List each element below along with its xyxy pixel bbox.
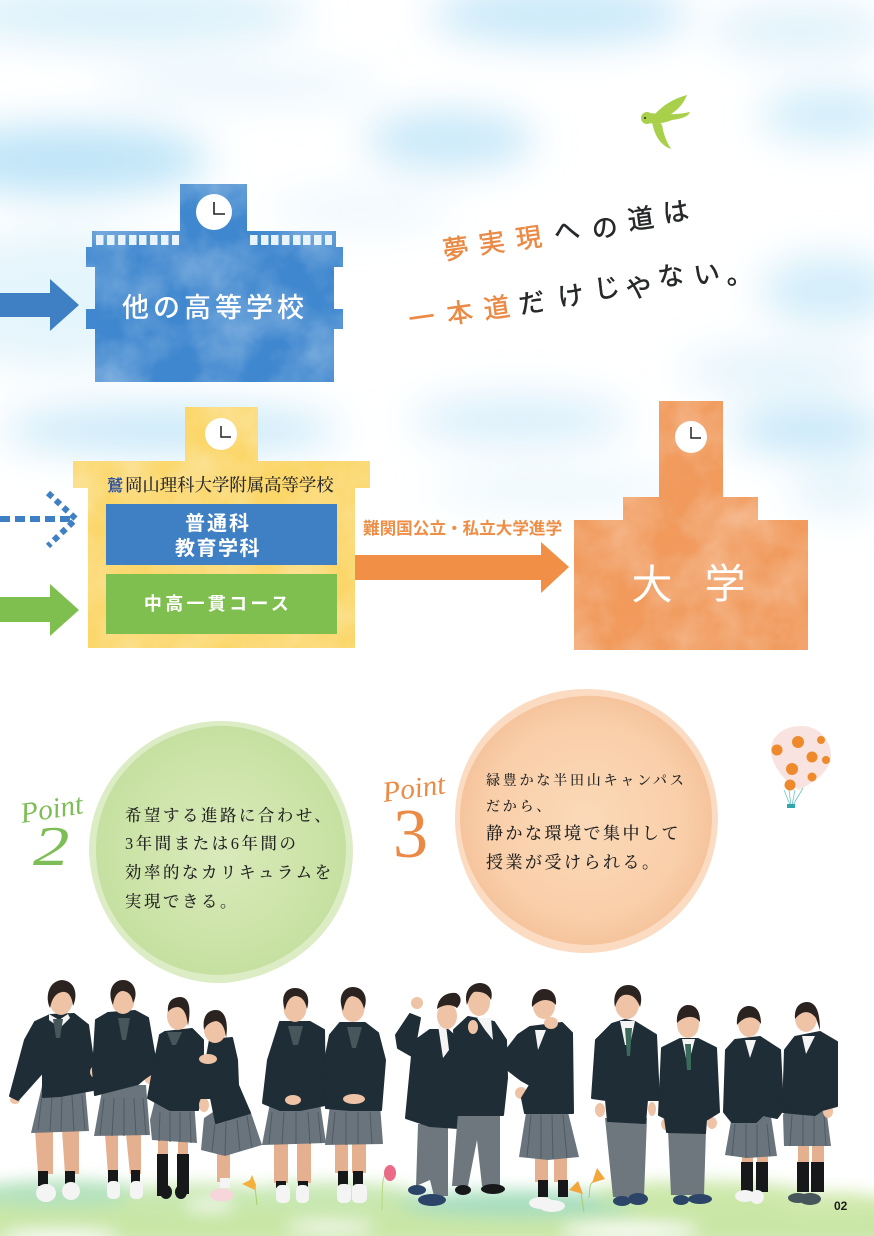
student 5 bbox=[262, 988, 326, 1203]
point 3 text: だから、 bbox=[486, 799, 553, 815]
panel: university building: 学 bbox=[704, 561, 746, 607]
flowers: yellow pair bbox=[569, 1168, 605, 1212]
headline: handwritten message: だ bbox=[516, 281, 547, 322]
headline: handwritten message: け bbox=[555, 274, 586, 315]
photo: group of students bbox=[10, 980, 837, 1212]
point 2 label: 2 bbox=[33, 816, 69, 878]
point 2 text: 実現できる。 bbox=[125, 892, 239, 911]
point 3 label bbox=[380, 768, 448, 873]
point 2 text: 3年間または6年間の bbox=[125, 834, 299, 853]
headline: handwritten message: 夢 bbox=[440, 227, 471, 268]
arrow: orange to university bbox=[355, 542, 569, 593]
student 7 bbox=[396, 993, 461, 1206]
headline: handwritten message: や bbox=[623, 266, 654, 307]
building label: 大 bbox=[632, 562, 672, 608]
panel: Okayama Rika University high school building bbox=[73, 407, 370, 648]
icon: clock bbox=[205, 418, 237, 450]
student 13 bbox=[783, 1002, 837, 1205]
headline: handwritten message: へ bbox=[551, 209, 582, 250]
student 3 bbox=[148, 997, 203, 1199]
student 6 bbox=[325, 987, 385, 1203]
icon: clock bbox=[196, 194, 232, 230]
point 3 text: 静かな環境で集中して bbox=[486, 824, 681, 843]
point 2 label: Point bbox=[17, 788, 86, 830]
student 12 bbox=[724, 1006, 783, 1204]
headline: handwritten message bbox=[406, 190, 754, 337]
student 1 bbox=[10, 980, 93, 1202]
course box: integrated: 中高一貫コース bbox=[144, 594, 292, 614]
headline: handwritten message: い bbox=[691, 252, 722, 293]
school name: 岡山理科大学附属高等学校 bbox=[125, 475, 334, 495]
point 2 label bbox=[17, 788, 86, 878]
point 2 text: 効率的なカリキュラムを bbox=[125, 863, 334, 882]
headline: handwritten message: 。 bbox=[723, 252, 754, 293]
student 2 bbox=[90, 980, 157, 1199]
course box: general and education: 普通科 bbox=[185, 512, 251, 535]
course box: general and education: 教育学科 bbox=[175, 537, 261, 560]
headline: handwritten message: 一 bbox=[406, 296, 437, 337]
panel: point 2 bbox=[17, 721, 353, 983]
building label: 他の高等学校 bbox=[122, 293, 308, 323]
headline: handwritten message: の bbox=[589, 206, 620, 247]
outer wash bbox=[455, 689, 718, 953]
background: grass bbox=[0, 1180, 874, 1236]
arrow: dashed blue bbox=[0, 493, 76, 546]
course box: integrated bbox=[106, 574, 337, 634]
outer wash bbox=[89, 721, 353, 983]
panel: other high schools building bbox=[86, 184, 343, 382]
headline: handwritten message: じ bbox=[591, 266, 622, 307]
point 3 text bbox=[486, 772, 687, 872]
icon: clock bbox=[675, 421, 707, 453]
icon: hot-air balloon bbox=[771, 726, 831, 808]
student 10 bbox=[592, 985, 659, 1206]
student 4 bbox=[193, 1010, 262, 1202]
point 3 label: Point bbox=[380, 768, 448, 809]
headline: handwritten message: 道 bbox=[481, 286, 512, 327]
point 2 text: 希望する進路に合わせ、 bbox=[125, 806, 333, 825]
headline: handwritten message: は bbox=[660, 190, 691, 231]
headline: handwritten message: な bbox=[655, 254, 686, 295]
headline: handwritten message: 現 bbox=[513, 216, 544, 257]
headline: handwritten message: 実 bbox=[476, 221, 507, 262]
student 9 bbox=[508, 989, 579, 1212]
point 3 text: 緑豊かな半田山キャンパス bbox=[486, 772, 687, 789]
flower: pink bbox=[382, 1165, 396, 1210]
point 2 text bbox=[125, 806, 334, 911]
inner wash bbox=[460, 696, 712, 945]
school logo: 鷲 bbox=[107, 472, 123, 496]
panel: point 3 bbox=[380, 689, 718, 953]
student 11 bbox=[659, 1005, 719, 1205]
headline: handwritten message: 道 bbox=[625, 197, 656, 238]
arrow: blue into other high schools bbox=[0, 279, 79, 331]
arrow label: 難関国公立・私立大学進学 bbox=[363, 518, 562, 538]
inner wash bbox=[96, 726, 346, 975]
point 3 label: 3 bbox=[393, 796, 428, 873]
point 3 text: 授業が受けられる。 bbox=[486, 853, 662, 872]
icon: green bird bbox=[641, 95, 690, 149]
windows row bbox=[96, 235, 332, 245]
flower: orange bbox=[242, 1175, 257, 1205]
page number: 02 bbox=[834, 1199, 848, 1213]
headline: handwritten message: 本 bbox=[444, 291, 475, 332]
course box: general and education bbox=[106, 504, 337, 565]
panel: university building bbox=[574, 401, 808, 650]
student 8 bbox=[452, 983, 507, 1195]
arrow: green bbox=[0, 584, 79, 636]
